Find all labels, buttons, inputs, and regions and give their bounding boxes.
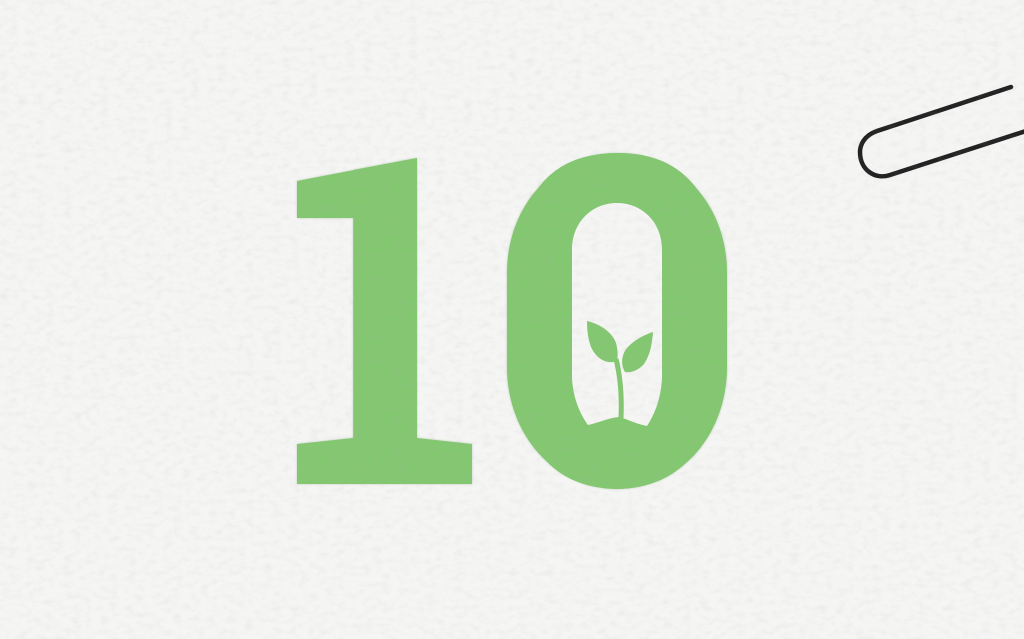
stem — [616, 359, 621, 418]
left leaf — [587, 321, 618, 362]
digit 0: 0 — [490, 56, 746, 585]
digit 1 — [296, 157, 473, 485]
digit 1: 1 — [255, 72, 505, 588]
soil and inner edge of the zero — [565, 225, 670, 443]
body of the 0 — [507, 153, 727, 489]
right leaf — [622, 332, 653, 372]
number 10 — [296, 152, 728, 490]
counter of the zero with soil mound — [572, 203, 662, 426]
icon: paperclip — [860, 87, 1024, 176]
icon: sprout inside the zero — [565, 203, 670, 443]
